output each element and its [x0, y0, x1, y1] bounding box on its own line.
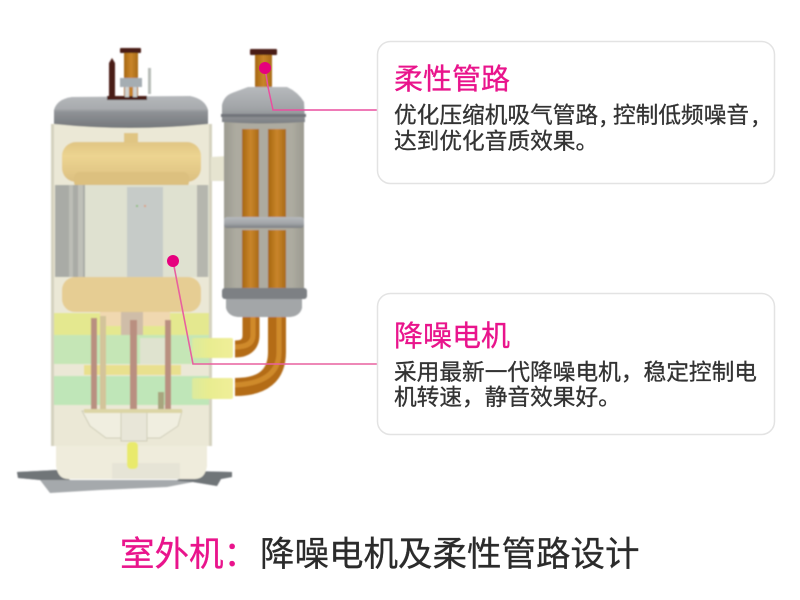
green band upper: [54, 335, 209, 364]
yellow band: [54, 312, 209, 340]
yellow oil pin: [127, 442, 138, 469]
top cap: [54, 96, 208, 128]
stator: [55, 185, 209, 277]
yellow connectors: [192, 338, 233, 399]
leader line: noise-reducing motor: [167, 255, 378, 364]
panel: noise-reducing motor: [378, 294, 774, 434]
yellow segment band: [84, 365, 181, 375]
text block: flexible pipe: 达到优化音质效果。: [394, 123, 598, 156]
motor rods: [91, 316, 171, 432]
inlet tube: [250, 49, 277, 88]
text block: flexible pipe: ,: [600, 97, 606, 130]
leader line: flexible pipe: [259, 62, 378, 110]
accumulator: [192, 49, 307, 399]
text block: noise-reducing motor: 机转速，静音效果好。: [394, 379, 621, 412]
heading: flexible pipe: 柔性管路: [394, 56, 510, 98]
heading: noise-reducing motor: 降噪电机: [394, 313, 510, 355]
accumulator bottom dome: [222, 288, 307, 317]
compressor shell: [51, 124, 212, 479]
text block: flexible pipe: ,: [752, 97, 758, 130]
accumulator body: [224, 120, 304, 292]
text block: flexible pipe: 控制低频噪音: [613, 97, 749, 130]
bracket: [211, 156, 228, 181]
accumulator top dome: [222, 87, 305, 124]
outlet pipes: [235, 312, 279, 387]
panel: flexible pipe: [378, 42, 774, 184]
text block: noise-reducing motor: 采用最新一代降噪电机，稳定控制电: [394, 354, 757, 387]
top terminals: [107, 48, 151, 100]
title: 室外机：: [120, 526, 258, 576]
compressor illustration: [17, 48, 232, 493]
base plate: [17, 470, 232, 493]
lower winding: [62, 277, 201, 312]
copper tubes: [242, 129, 286, 290]
middle ring: [224, 217, 304, 228]
upper winding: [62, 133, 201, 188]
green band lower: [54, 376, 209, 405]
lower bearing: [82, 409, 182, 441]
text block: flexible pipe: 优化压缩机吸气管路: [394, 97, 598, 130]
title: 降噪电机及柔性管路设计: [260, 526, 640, 576]
